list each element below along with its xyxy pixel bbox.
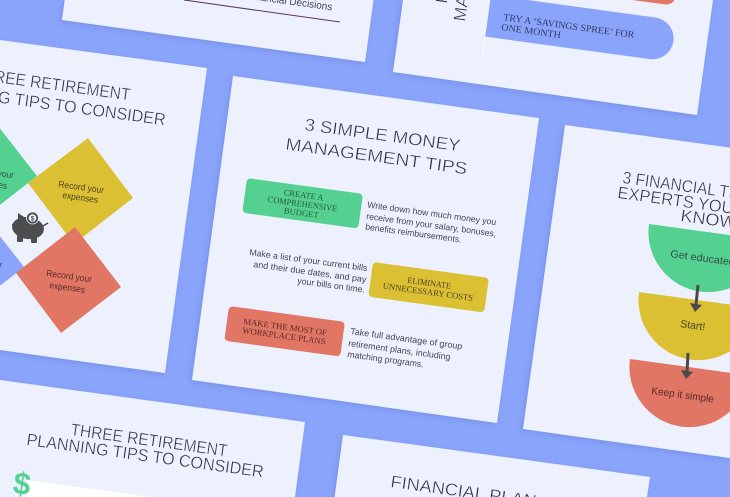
text: make a list: Make a list of your current bills [249,247,369,273]
panel: left slide, retirement tips diamonds: expenses [49,280,86,295]
title: 3 SIMPLE MONEY [303,115,462,155]
text: take full advantage [347,326,463,369]
text: make a list: and their due dates, and pay [253,259,368,285]
text: make a list: your bills on time. [297,276,365,295]
panel: right slide, financial tips: Keep it simple [651,385,715,406]
panel: right slide, financial tips [523,125,730,458]
button: create a comprehensive budget [242,178,363,229]
button: eliminate unnecessary costs [368,262,489,313]
semicircle: start [631,292,730,368]
panel: right slide, financial tips: Start! [680,318,706,333]
button: make the most of workplace plans: WORKPLACE PLANS [242,325,326,346]
panel: left slide, retirement tips diamonds: expenses [62,190,99,205]
panel: top-right slide: TRY A ‘SAVINGS SPREE’ FOR [503,12,635,41]
text: take full advantage: retirement plans, including [348,338,451,362]
text: write down: benefits reimbursements. [365,222,462,245]
button: eliminate unnecessary costs: UNNECESSARY COSTS [382,281,474,303]
panel: bottom-right slide [335,435,650,497]
panel: left slide, retirement tips diamonds: Record your [46,268,93,284]
semicircle: keep it simple [622,359,730,435]
text: write down [365,200,497,245]
panel: left slide, retirement tips diamonds [0,40,207,373]
title [284,115,468,178]
title: MANAGEMENT TIPS [284,135,468,178]
panel: bottom-left slide: PLANNING TIPS TO CONSIDER [25,430,265,481]
text: take full advantage: matching programs. [347,349,424,369]
text: write down: receive from your salary, bonuses, [366,211,497,239]
arrow: start to simple [681,353,693,379]
text: write down: Write down how much money you [367,200,497,227]
icon: piggy bank: $ [31,216,35,222]
button: create a comprehensive budget: BUDGET [283,205,320,220]
semicircle: get educated [641,224,730,300]
panel: center slide, money management tips [192,76,539,423]
button: eliminate unnecessary costs: ELIMINATE [407,275,452,291]
panel: top-left slide [62,0,374,62]
panel: top-right slide: ONE MONTH [501,22,562,41]
button: make the most of workplace plans [224,306,345,357]
panel: bottom-left slide [0,380,305,497]
icon: piggy bank [11,212,48,243]
panel: bottom-left slide: THREE RETIREMENT [69,420,229,460]
text: take full advantage: Take full advantage of group [350,326,463,351]
panel: top-right slide [393,0,713,115]
button: create a comprehensive budget: COMPREHENSIVE [267,194,338,213]
button: make the most of workplace plans: MAKE THE MOST OF [243,316,328,338]
text: make a list [249,247,369,295]
button: create a comprehensive budget: CREATE A [283,187,325,203]
arrow: educated to start [690,285,702,312]
panel: left slide, retirement tips diamonds: Record your [58,179,105,195]
